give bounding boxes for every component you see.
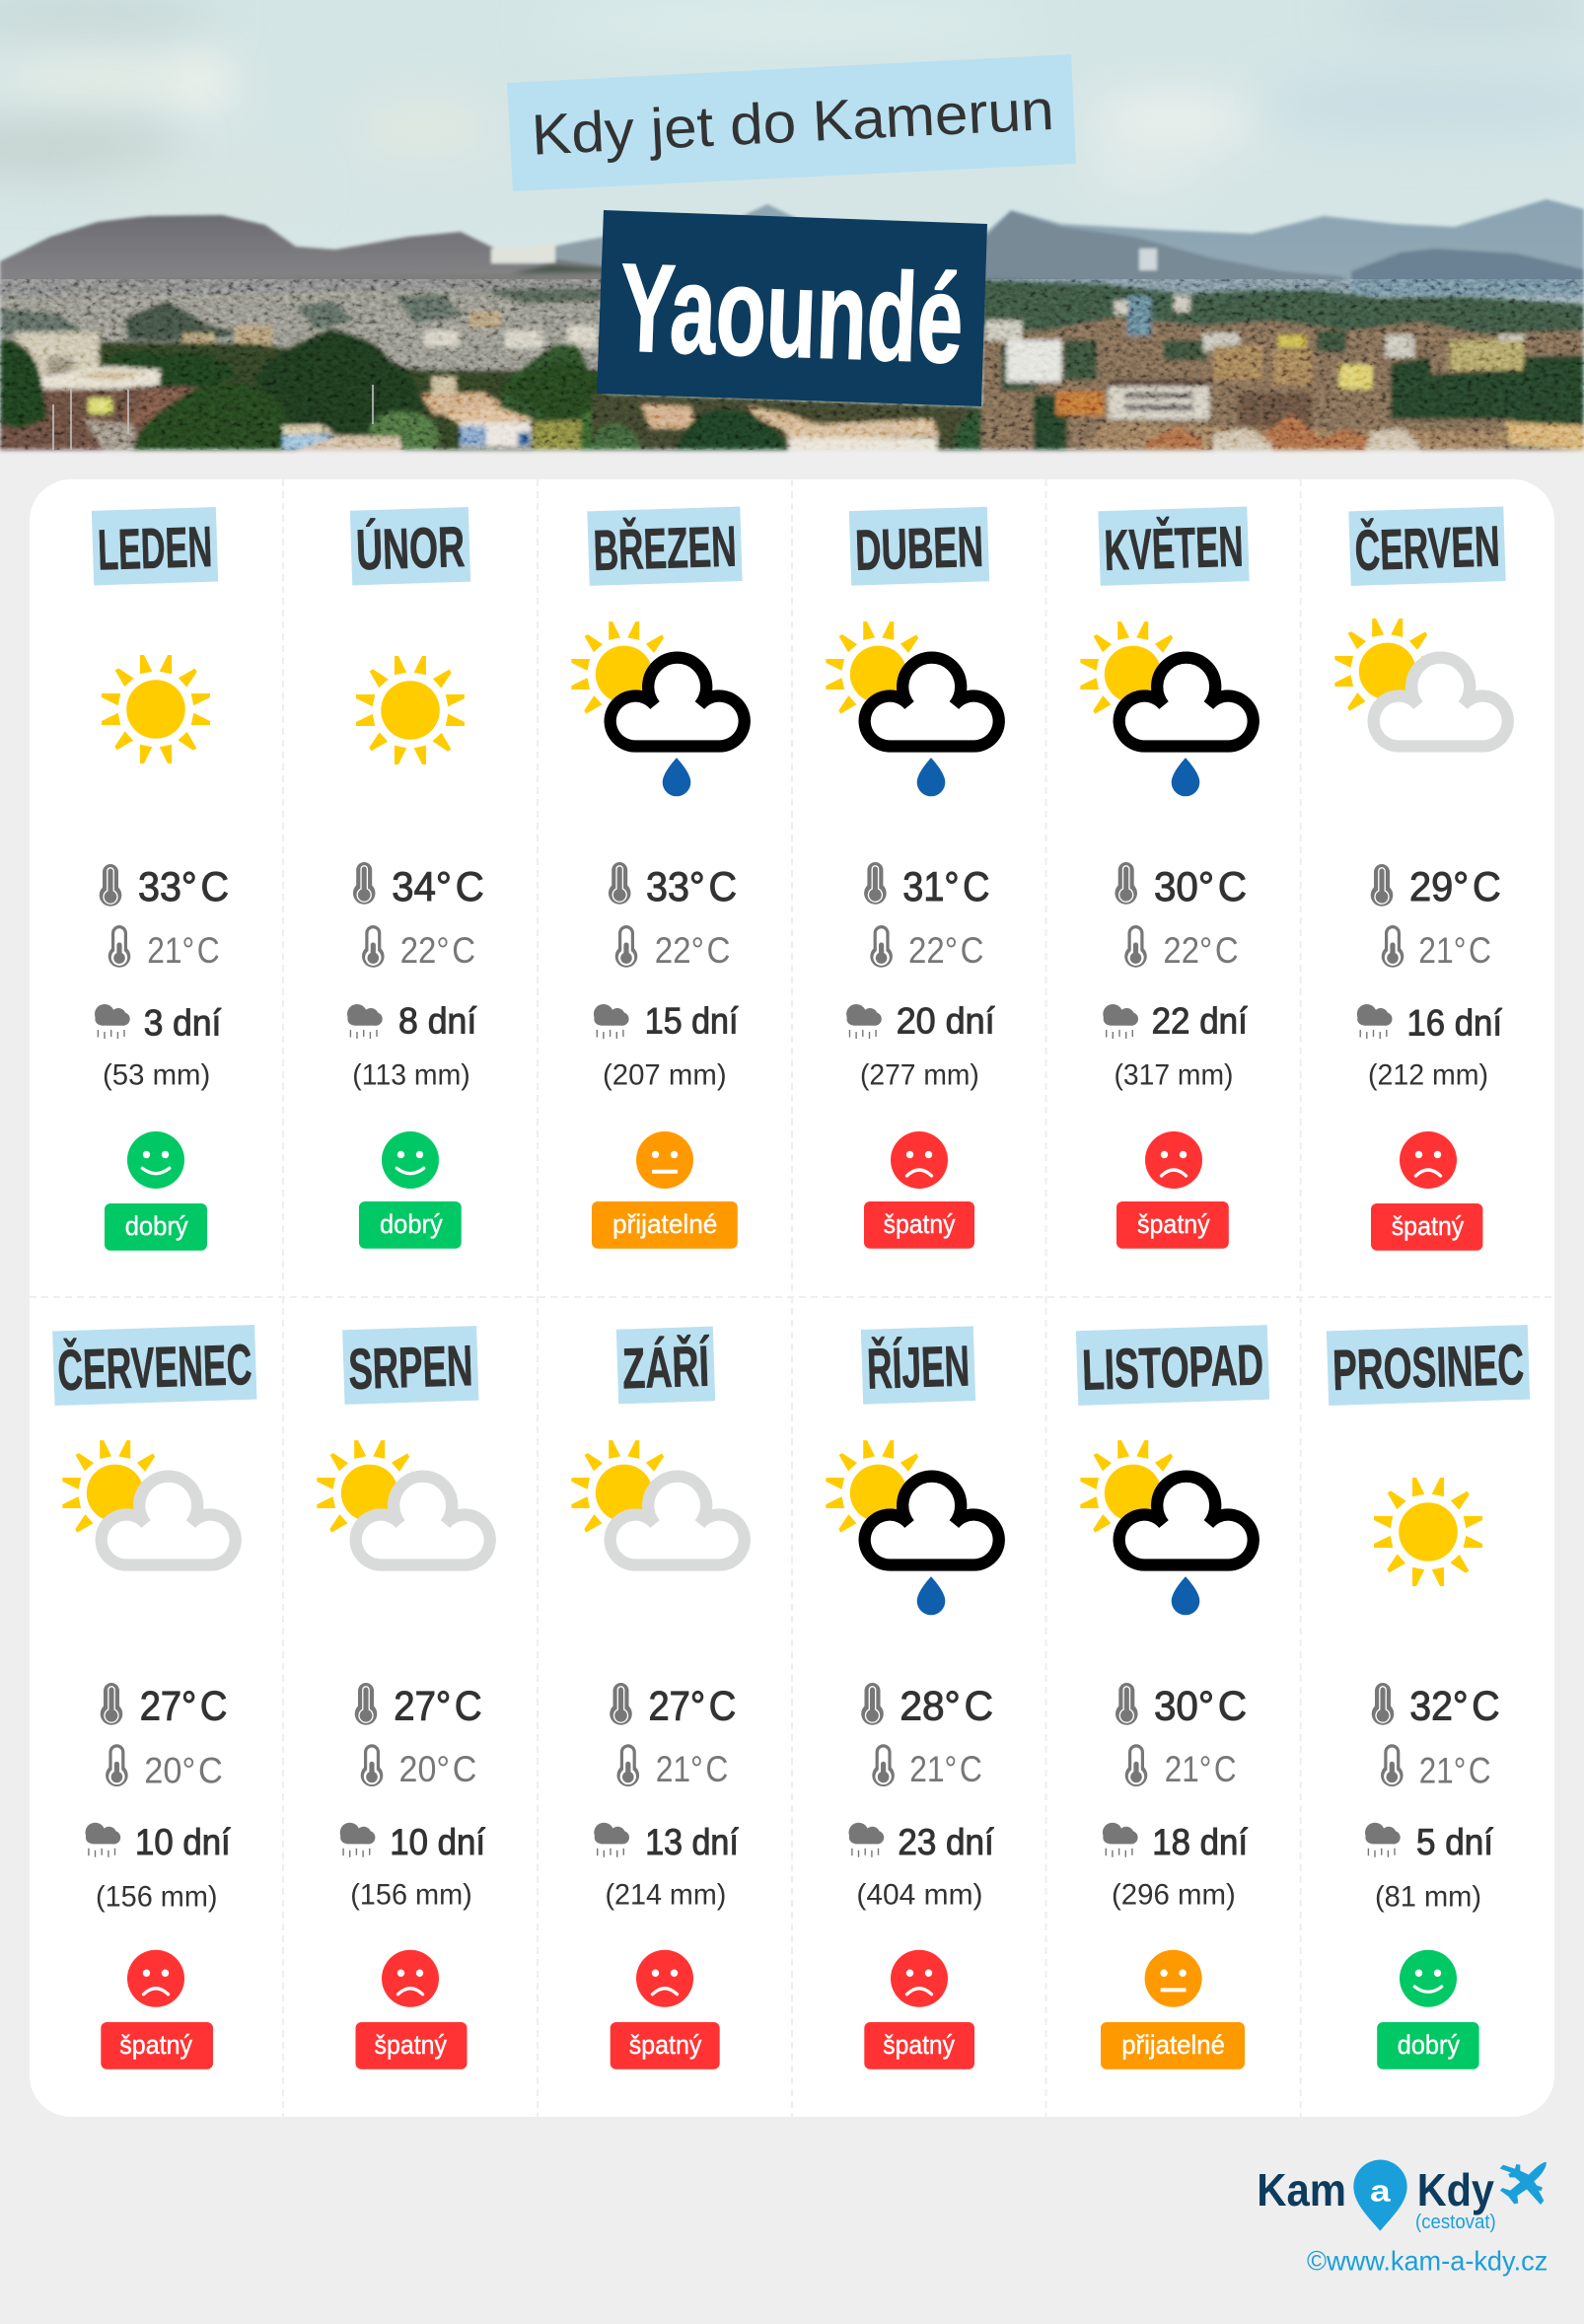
- rating badge: špatný: [629, 2030, 702, 2060]
- high temperature: 33°C: [138, 863, 229, 909]
- rating face: [127, 1950, 184, 2007]
- month label: DUBEN: [854, 515, 984, 583]
- high temperature: [1115, 862, 1247, 909]
- rainy days: [340, 1822, 486, 1862]
- high temperature: [101, 1682, 227, 1728]
- precipitation: (53 mm): [103, 1058, 210, 1091]
- low temperature: [362, 925, 475, 971]
- rainy days: 18 dní: [1152, 1822, 1249, 1862]
- low temperature: 22°C: [1163, 930, 1239, 971]
- high temperature: 27°C: [649, 1682, 736, 1728]
- month label: [342, 1326, 478, 1405]
- panel: KVĚTEN: [1080, 507, 1254, 1249]
- low temperature: [617, 1744, 728, 1789]
- rating badge: [359, 1201, 462, 1249]
- precipitation: (296 mm): [1112, 1879, 1236, 1912]
- high temperature: 30°C: [1154, 863, 1247, 909]
- precipitation: (207 mm): [603, 1058, 727, 1091]
- icon: sun with rain cloud: [1080, 1440, 1254, 1615]
- left dark foreground base: [0, 340, 604, 450]
- month label: [52, 1325, 256, 1406]
- icon: sun with rain cloud: [1080, 621, 1254, 796]
- precipitation: (277 mm): [860, 1058, 979, 1091]
- rainy days: 23 dní: [898, 1822, 994, 1862]
- low temperature: 22°C: [400, 930, 475, 971]
- rating badge: špatný: [1392, 1211, 1465, 1241]
- high temperature: 34°C: [392, 863, 484, 909]
- rainy days: 15 dní: [645, 1001, 739, 1042]
- rainy days: [85, 1822, 231, 1862]
- panel: LISTOPAD: [1076, 1325, 1269, 2070]
- month label: [1076, 1325, 1269, 1406]
- right city base: [981, 292, 1584, 450]
- rating badge: špatný: [883, 2030, 955, 2060]
- rating badge: přijatelné: [1121, 2030, 1225, 2060]
- month label: ČERVENEC: [56, 1333, 252, 1403]
- high temperature: 27°C: [140, 1682, 227, 1728]
- left city base: [0, 268, 604, 450]
- panel: ZÁŘÍ: [571, 1327, 745, 2070]
- high temperature: 29°C: [1409, 863, 1501, 909]
- rainy days: 5 dní: [1416, 1822, 1494, 1862]
- rainy days: [848, 1822, 994, 1862]
- rating badge: [101, 2022, 213, 2070]
- panel: SRPEN: [317, 1326, 490, 2070]
- panel: ÚNOR: [347, 507, 484, 1249]
- low temperature: 21°C: [1165, 1749, 1237, 1789]
- rating badge: [864, 1201, 974, 1249]
- high temperature: [100, 863, 229, 909]
- icon: sun with grey cloud: [62, 1440, 236, 1565]
- month label: [616, 1327, 715, 1404]
- precipitation: (212 mm): [1368, 1058, 1488, 1091]
- icon: sun with grey cloud: [317, 1440, 490, 1565]
- rating face: [891, 1950, 948, 2007]
- rating badge: špatný: [1137, 1209, 1210, 1239]
- panel: DUBEN: [826, 507, 999, 1249]
- high temperature: [864, 862, 989, 909]
- icon: sun: [102, 655, 210, 763]
- low temperature: 21°C: [909, 1749, 982, 1789]
- rating badge: [592, 1201, 738, 1249]
- rainy days: 10 dní: [390, 1822, 486, 1862]
- title: Yaoundé: [597, 210, 987, 406]
- high temperature: [355, 1682, 482, 1728]
- area beneath the title panel: [592, 393, 986, 450]
- low temperature: [1381, 1744, 1491, 1791]
- month label: [350, 507, 470, 585]
- month label: [849, 507, 989, 586]
- rating face: [1400, 1950, 1457, 2007]
- month label: ZÁŘÍ: [621, 1335, 711, 1401]
- high temperature: 33°C: [646, 863, 737, 909]
- icon: sun: [1374, 1478, 1482, 1586]
- icon: map pin: [1353, 2160, 1407, 2231]
- rating badge: [355, 2022, 468, 2070]
- rainy days: 16 dní: [1406, 1002, 1503, 1043]
- month label: SRPEN: [347, 1334, 473, 1402]
- month label: [1348, 506, 1506, 586]
- high temperature: [353, 862, 484, 909]
- rating badge: [1116, 1201, 1229, 1249]
- panel: PROSINEC: [1327, 1325, 1530, 2070]
- month label: ÚNOR: [355, 515, 466, 582]
- rainy days: [1357, 1002, 1503, 1043]
- rainy days: [95, 1002, 222, 1043]
- high temperature: [609, 862, 737, 909]
- fine texture over the city: [0, 279, 1584, 450]
- low temperature: 21°C: [1418, 930, 1491, 971]
- rating face: [1145, 1950, 1202, 2007]
- low temperature: 21°C: [656, 1749, 728, 1789]
- logo: Kam a Kdy: Kam: [1257, 2164, 1346, 2215]
- far mountains: [0, 199, 1584, 306]
- rating badge: dobrý: [380, 1209, 443, 1239]
- panel: ČERVENEC: [52, 1325, 256, 2070]
- title label: Kdy jet do Kamerun: Kdy jet do Kamerun: [530, 78, 1055, 168]
- low temperature: [1382, 925, 1491, 971]
- rating badge: [1371, 1203, 1482, 1251]
- city and foreground: [0, 264, 1584, 450]
- rating badge: [1101, 2022, 1245, 2070]
- low temperature: [615, 925, 730, 971]
- rating badge: špatný: [884, 1209, 956, 1239]
- rating face: [1145, 1131, 1202, 1189]
- rainy days: 3 dní: [144, 1002, 222, 1043]
- precipitation: (81 mm): [1375, 1881, 1481, 1914]
- rating badge: [864, 2022, 974, 2070]
- month label: LISTOPAD: [1081, 1333, 1264, 1403]
- rating badge: špatný: [375, 2030, 447, 2060]
- title: Yaoundé: Yaoundé: [617, 237, 966, 390]
- rating face: [127, 1131, 184, 1189]
- month label: LEDEN: [97, 515, 213, 583]
- rating badge: špatný: [119, 2030, 192, 2060]
- precipitation: (156 mm): [350, 1879, 472, 1912]
- rating face: [636, 1131, 693, 1189]
- panel: LEDEN: [92, 507, 229, 1251]
- high temperature: [1372, 1682, 1500, 1728]
- rating badge: dobrý: [125, 1211, 188, 1241]
- month label: BŘEZEN: [593, 514, 738, 583]
- low temperature: 20°C: [144, 1751, 223, 1791]
- panel: ŘÍJEN: [826, 1326, 999, 2070]
- precipitation: (113 mm): [352, 1058, 470, 1091]
- month label: [587, 506, 743, 586]
- low temperature: [361, 1744, 476, 1789]
- rainy days: 10 dní: [135, 1822, 231, 1862]
- month label: [92, 507, 218, 585]
- rainy days: [1365, 1822, 1494, 1862]
- high temperature: [610, 1682, 736, 1728]
- precipitation: (404 mm): [856, 1879, 982, 1912]
- high temperature: 32°C: [1409, 1682, 1500, 1728]
- rainy days: [594, 1001, 739, 1042]
- icon: sun with grey cloud: [1334, 618, 1508, 747]
- high temperature: 30°C: [1154, 1682, 1247, 1728]
- low temperature: 21°C: [147, 930, 220, 971]
- rating badge: dobrý: [1398, 2030, 1460, 2060]
- rainy days: 13 dní: [645, 1822, 739, 1862]
- rainy days: 8 dní: [398, 1001, 477, 1042]
- month label: [861, 1326, 975, 1405]
- low temperature: 20°C: [398, 1749, 476, 1789]
- month label: KVĚTEN: [1104, 515, 1245, 583]
- low temperature: [872, 1744, 982, 1789]
- icon: sun with rain cloud: [826, 1440, 999, 1615]
- low temperature: [1125, 1744, 1237, 1789]
- title label: Kdy jet do Kamerun: [507, 54, 1076, 191]
- rating face: [891, 1131, 948, 1189]
- month label: ŘÍJEN: [866, 1334, 971, 1402]
- low temperature: 21°C: [1419, 1751, 1491, 1791]
- precipitation: (156 mm): [96, 1881, 217, 1914]
- rating badge: [1377, 2022, 1479, 2070]
- icon: map pin: a: [1370, 2175, 1392, 2209]
- low temperature: 22°C: [908, 930, 983, 971]
- rainy days: [1103, 1001, 1248, 1042]
- rating face: [1400, 1131, 1457, 1189]
- icon: sun with rain cloud: [826, 621, 999, 796]
- rating badge: [611, 2022, 720, 2070]
- rainy days: 20 dní: [897, 1001, 995, 1042]
- icon: sun with rain cloud: [571, 621, 745, 796]
- logo: Kam a Kdy: [1257, 2160, 1547, 2233]
- rainy days: [594, 1822, 739, 1862]
- website credit: ©www.kam-a-kdy.cz: [1307, 2246, 1548, 2277]
- rating face: [382, 1950, 439, 2007]
- panel: BŘEZEN: [571, 506, 745, 1249]
- panel: ČERVEN: [1334, 506, 1508, 1251]
- precipitation: (214 mm): [606, 1879, 726, 1912]
- rainy days: [846, 1001, 995, 1042]
- rating badge: přijatelné: [612, 1209, 717, 1239]
- precipitation: (317 mm): [1115, 1058, 1233, 1091]
- logo: Kam a Kdy: Kdy: [1417, 2164, 1494, 2215]
- rating badge: [105, 1203, 207, 1251]
- icon: sun with grey cloud: [571, 1440, 745, 1565]
- low temperature: [870, 925, 983, 971]
- logo: Kam a Kdy: (cestovat): [1415, 2212, 1496, 2233]
- rating face: [382, 1131, 439, 1189]
- header photo: Yaoundé skyline: [0, 0, 1584, 450]
- high temperature: 31°C: [902, 863, 989, 909]
- icon: airplane: [1500, 2162, 1547, 2205]
- rainy days: 22 dní: [1152, 1001, 1248, 1042]
- low temperature: 22°C: [655, 930, 730, 971]
- month label: [1098, 507, 1250, 586]
- rainy days: [1103, 1822, 1249, 1862]
- rainy days: [347, 1001, 477, 1042]
- low temperature: [106, 1744, 223, 1791]
- high temperature: 27°C: [394, 1682, 482, 1728]
- low temperature: [108, 925, 220, 971]
- low temperature: [1124, 925, 1239, 971]
- high temperature: 28°C: [900, 1682, 993, 1728]
- high temperature: [1371, 863, 1501, 909]
- icon: sun: [356, 656, 465, 764]
- rating face: [636, 1950, 693, 2007]
- panel: climate table card: [30, 479, 1554, 2117]
